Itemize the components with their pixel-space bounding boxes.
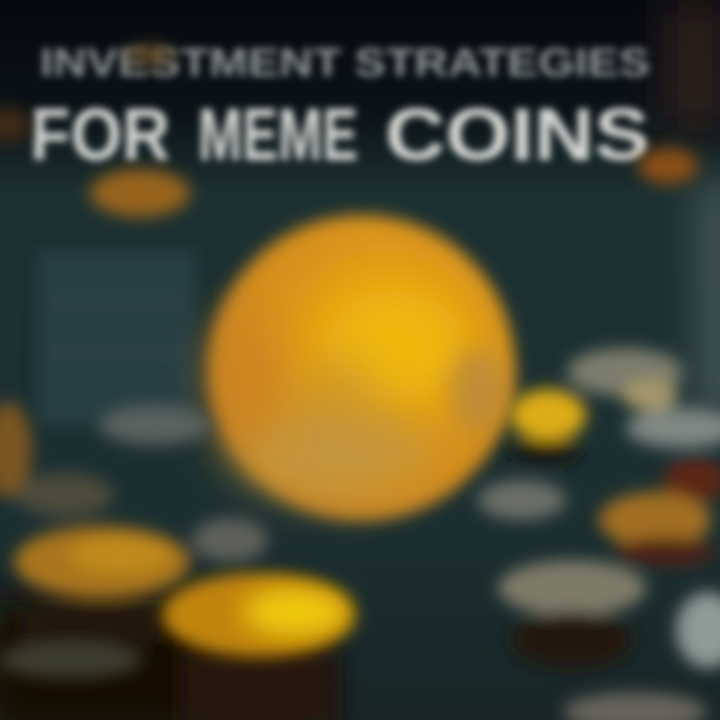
right coins (478, 348, 720, 720)
left chart panel (38, 250, 196, 425)
top coins (0, 45, 698, 217)
left coins (0, 402, 268, 678)
central gold coin sphere (209, 215, 515, 521)
title: COINS (385, 93, 650, 176)
title: INVESTMENT STRATEGIES (40, 41, 650, 85)
title: MEME (198, 93, 358, 176)
title (30, 41, 650, 176)
title: FOR (30, 93, 170, 176)
front gold coin (162, 573, 354, 720)
